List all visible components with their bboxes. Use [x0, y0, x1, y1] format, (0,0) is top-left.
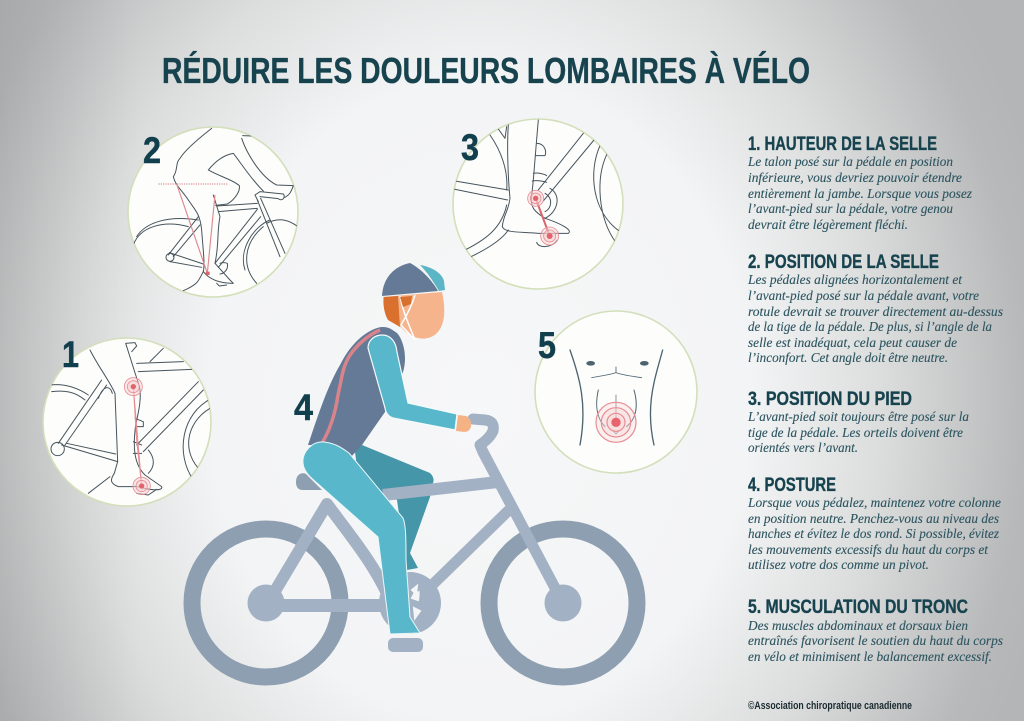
head [383, 292, 444, 339]
title: RÉDUIRE LES DOULEURS LOMBAIRES À VÉLO [162, 50, 810, 91]
text block: 4 posture: les mouvements excessifs du haut du corps et [748, 542, 988, 557]
chainring [379, 572, 441, 634]
text block: 1 saddle height: 1. HAUTEUR DE LA SELLE [748, 134, 937, 155]
text block: 4 posture: en position neutre. Penchez-vous au niveau des [748, 511, 999, 526]
text block: 5 core muscles: 5. MUSCULATION DU TRONC [748, 597, 968, 618]
text block: 1 saddle height: inférieure, vous devriez pouvoir étendre [748, 170, 962, 185]
text block: 4 posture: Lorsque vous pédalez, maintenez votre colonne [747, 495, 1001, 510]
text block: 4 posture: 4. POSTURE [748, 475, 836, 496]
rider torso [308, 327, 405, 458]
spine [322, 330, 380, 443]
number 1: 1 [62, 334, 79, 375]
text block: 5 core muscles: entraînés favorisent le soutien du haut du corps [748, 633, 1003, 648]
panel: inset 5 core muscles [535, 311, 697, 473]
text block: 5 core muscles: en vélo et minimisent le balancement excessif. [748, 649, 992, 664]
text block: 3 foot position: tige de la pédale. Les orteils doivent être [748, 425, 963, 440]
text block: 2 saddle position [747, 252, 1003, 365]
number 5: 5 [538, 325, 556, 366]
text block: 3 foot position: orientés vers l’avant. [748, 440, 858, 455]
text block: 1 saddle height: devrait être légèrement fléchi. [748, 217, 908, 232]
text block: 2 saddle position: 2. POSITION DE LA SELLE [748, 252, 939, 273]
text block: 5 core muscles [747, 597, 1003, 664]
number 2: 2 [143, 130, 161, 171]
text block: 2 saddle position: Les pédales alignées horizontalement et [747, 272, 962, 287]
rear wheel [192, 529, 340, 677]
text block: 2 saddle position: l’inconfort. Cet angle doit être neutre. [748, 350, 948, 365]
helmet [382, 263, 438, 296]
text block: 2 saddle position: rotule devrait se trouver directement au-dessus [748, 304, 1003, 319]
panel: cyclist on bicycle [192, 263, 637, 677]
text block: 1 saddle height: Le talon posé sur la pédale en position [747, 154, 953, 169]
text block: 2 saddle position: l’avant-pied posé sur la pédale avant, votre [748, 288, 979, 303]
panel: inset 2 saddle position [128, 127, 300, 297]
text block: 3 foot position [747, 389, 969, 455]
ear straps [400, 295, 415, 340]
back of head [384, 296, 400, 327]
number 3: 3 [461, 127, 479, 168]
text block: 1 saddle height: l’avant-pied sur la pédale, votre genou [748, 201, 953, 216]
saddle [296, 473, 322, 490]
text block: 1 saddle height: entièrement la jambe. Lorsque vous posez [748, 186, 973, 201]
text block: 5 core muscles: Des muscles abdominaux et dorsaux bien [747, 618, 968, 633]
rider far leg [355, 445, 434, 570]
text block: 4 posture: hanches et évitez le dos rond. Si possible, évitez [748, 526, 1000, 541]
text block: 2 saddle position: selle est inadéquat, cela peut causer de [748, 335, 957, 350]
front wheel [489, 529, 637, 677]
ear [400, 296, 412, 307]
text block: 3 foot position: 3. POSITION DU PIED [748, 389, 912, 410]
copyright: ©Association chiropratique canadienne [748, 700, 912, 712]
bicycle frame [248, 419, 582, 622]
rider arm [368, 335, 457, 430]
text block: 3 foot position: L’avant-pied soit toujours être posé sur la [747, 409, 969, 424]
rider near leg [303, 442, 420, 634]
hand [456, 415, 471, 432]
number 4: 4 [294, 387, 313, 428]
helmet visor [420, 265, 445, 291]
text block: 4 posture [747, 475, 1001, 572]
text block: 1 saddle height [747, 134, 973, 232]
panel: inset 3 foot position [453, 119, 623, 289]
panel: inset 1 saddle height [43, 338, 212, 506]
pedal [388, 638, 423, 652]
text block: 2 saddle position: de la tige de la pédale. De plus, si l’angle de la [748, 319, 992, 334]
text block: 4 posture: utilisez votre dos comme un pivot. [748, 557, 929, 572]
